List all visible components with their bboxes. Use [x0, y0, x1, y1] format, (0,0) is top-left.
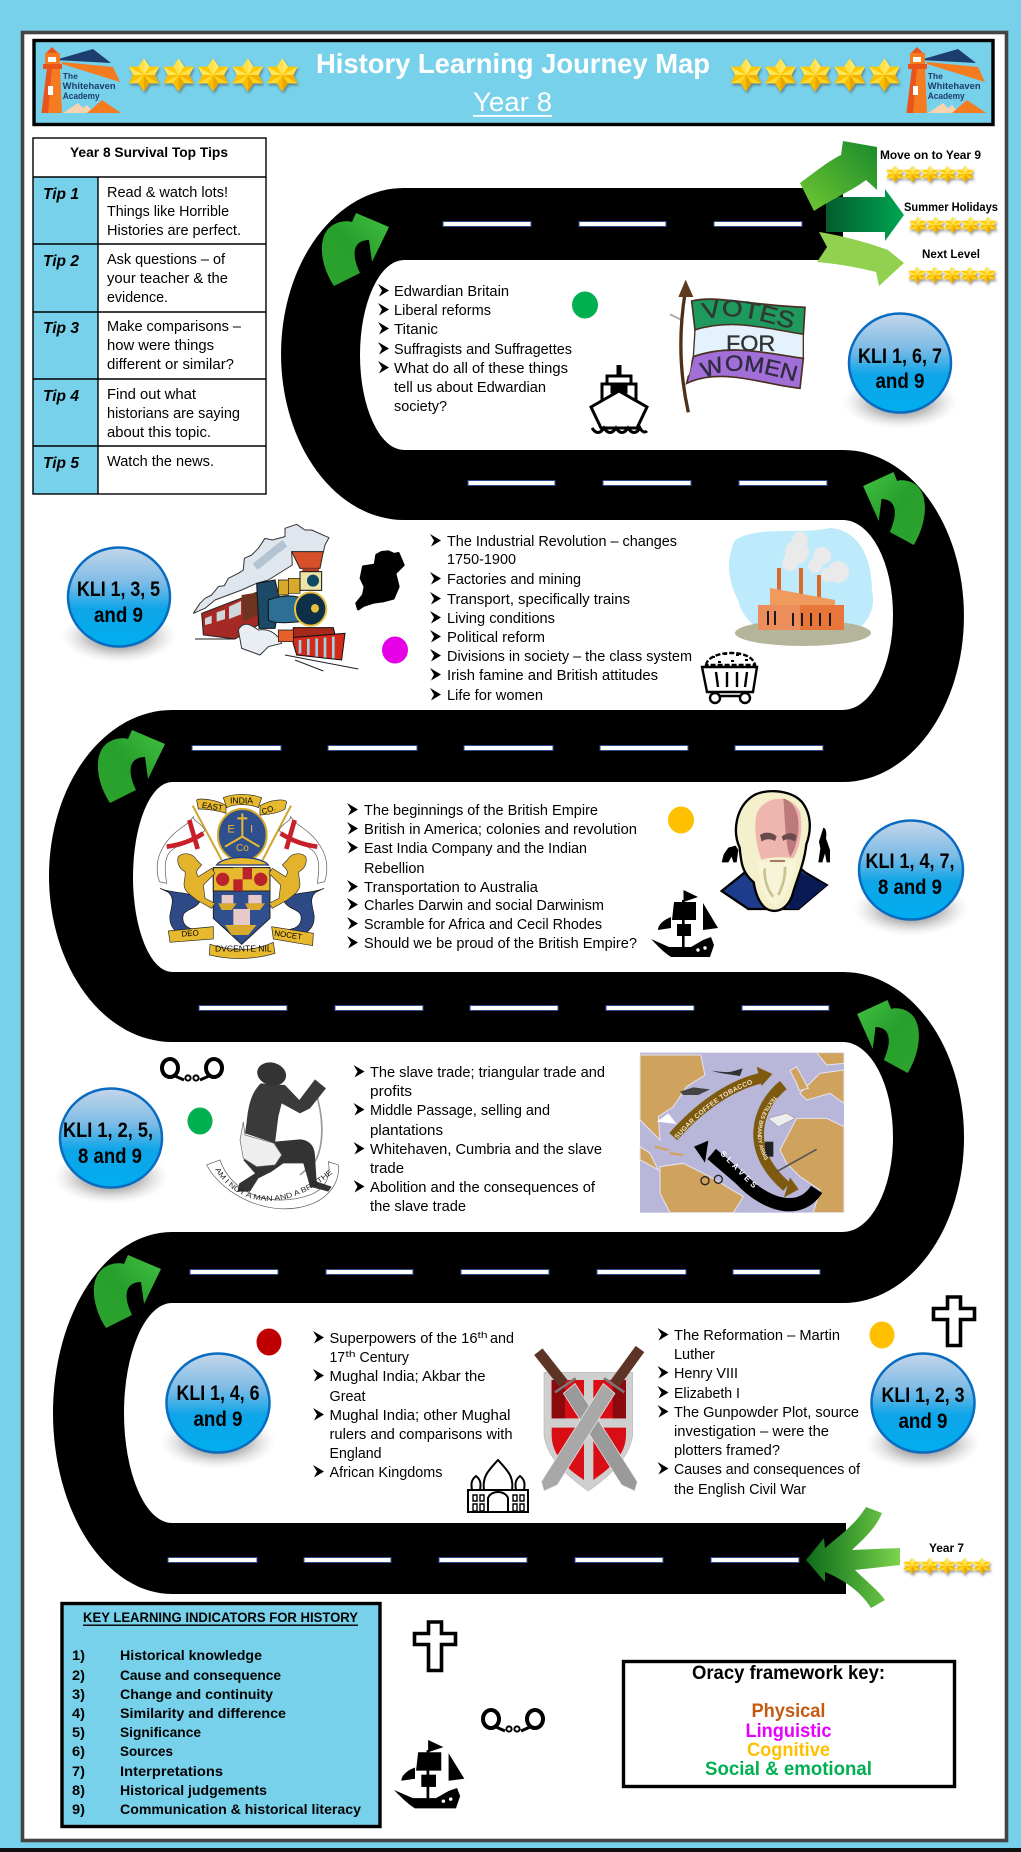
indicator list: 2)	[72, 1668, 85, 1683]
label: Move on to Year 9 with stars	[880, 150, 981, 182]
panel: Superpowers and Mughal India	[160, 1297, 981, 1512]
bullet list: Elizabeth I	[674, 1386, 740, 1402]
arrow: summer holidays	[826, 189, 904, 241]
image: Votes for Women flag badge	[670, 280, 806, 413]
tip 4: about this topic.	[107, 425, 211, 441]
icon: five gold stars left	[129, 58, 298, 92]
key: cognitive: Cognitive	[747, 1740, 830, 1761]
image: East India Company coat of arms	[157, 794, 327, 959]
tip 2: Tip 2	[43, 253, 79, 270]
KLI ball: 1, 4, 6 and 9: KLI 1, 4, 6	[176, 1382, 260, 1405]
icon: academy logo left	[42, 47, 121, 113]
indicator list: 3)	[72, 1687, 85, 1702]
tip 4: Tip 4	[43, 388, 79, 405]
oracy dot: cognitive	[870, 1322, 894, 1348]
title: History Learning Journey Map	[316, 48, 710, 79]
KLI ball: 1, 2, 5, 8 and 9: 8 and 9	[78, 1145, 142, 1168]
bullet list	[347, 803, 637, 952]
subtitle: Year 8: Year 8	[473, 87, 552, 117]
tip 2: Ask questions – of	[107, 252, 226, 268]
icon: map of Ireland	[357, 552, 403, 609]
bullet list: Luther	[674, 1347, 715, 1363]
indicator list: 9)	[72, 1802, 85, 1817]
indicator list: 4)	[72, 1706, 85, 1721]
KLI ball: 1, 4, 7, 8 and 9: 8 and 9	[878, 876, 942, 899]
tip 1: Histories are perfect.	[107, 223, 241, 239]
panel: survival top tips table	[33, 138, 266, 494]
label: Summer Holidays with stars: Summer Holidays	[904, 202, 998, 214]
bullet list: Superpowers of the 16	[330, 1331, 478, 1347]
indicator list: Historical knowledge	[120, 1648, 263, 1663]
road lane dashes	[168, 222, 829, 1562]
arrow: next level	[817, 232, 904, 286]
bullet list: Mughal India; Akbar the	[330, 1369, 486, 1385]
tip 1	[43, 185, 241, 239]
icon: cross	[414, 1622, 456, 1670]
road: winding black road	[49, 188, 964, 1594]
indicator list: 8)	[72, 1783, 85, 1798]
icon: academy logo right	[906, 47, 986, 113]
bullet list: profits	[370, 1084, 412, 1100]
image: East India Company coat of arms: DEO	[181, 928, 199, 939]
bullet list: What do all of these things	[394, 361, 568, 377]
panel: British Empire	[157, 791, 969, 959]
image: triangular trade map: SUGAR COFFEE TOBACCO	[674, 1080, 752, 1138]
bullet list: The Gunpowder Plot, source	[674, 1405, 859, 1421]
image: East India Company coat of arms: I	[250, 823, 253, 835]
bullet list: plantations	[370, 1123, 443, 1139]
KLI ball: 1, 3, 5 and 9: KLI 1, 3, 5	[77, 578, 160, 601]
indicator list: Significance	[120, 1725, 201, 1740]
bullet list: British in America; colonies and revolution	[364, 822, 637, 838]
panel: Industrial Revolution	[61, 524, 873, 704]
bullet list: Factories and mining	[447, 572, 581, 588]
bullet list: Divisions in society – the class system	[447, 649, 692, 665]
bullet list: The Industrial Revolution – changes	[447, 534, 677, 550]
KLI ball: 1, 2, 5, 8 and 9	[53, 1088, 169, 1204]
bullet list: th	[346, 1349, 356, 1360]
KLI ball: 1, 4, 6 and 9: and 9	[194, 1408, 242, 1431]
bullet list: investigation – were the	[674, 1424, 829, 1440]
heading: Oracy framework key:	[692, 1663, 885, 1684]
image: East India Company coat of arms: Co	[236, 843, 249, 854]
tip 5: Watch the news.	[107, 454, 214, 470]
bullet list: Causes and consequences of	[674, 1462, 861, 1478]
panel: key learning indicators	[62, 1604, 380, 1826]
bullet list: Living conditions	[447, 611, 555, 627]
icon: cross	[934, 1297, 974, 1346]
indicator list: Similarity and difference	[120, 1706, 287, 1721]
bullet list: tell us about Edwardian	[394, 380, 546, 396]
bullet list: Liberal reforms	[394, 303, 491, 319]
bullet list: England	[330, 1446, 382, 1462]
image: East India Company coat of arms: EAST	[201, 801, 223, 813]
KLI ball: 1, 2, 3 and 9	[865, 1354, 981, 1470]
oracy dot: physical	[256, 1328, 282, 1356]
image: factory	[729, 528, 873, 646]
tip 5: Tip 5	[43, 455, 80, 472]
arrow: move on to Year 9	[800, 141, 877, 211]
bullet list: Scramble for Africa and Cecil Rhodes	[364, 917, 602, 933]
key: social and emotional: Social & emotional	[705, 1759, 872, 1780]
KLI ball: 1, 2, 5, 8 and 9: KLI 1, 2, 5,	[63, 1119, 153, 1142]
image: East India Company coat of arms: DVCENTE NIL	[215, 945, 272, 954]
image: East India Company coat of arms: NOCET	[274, 929, 303, 942]
image: Votes for Women flag badge: VOTES	[700, 300, 794, 328]
label: Year 7 with stars	[903, 1541, 991, 1574]
KLI ball: 1, 3, 5 and 9	[61, 548, 177, 663]
image: East India Company coat of arms: CO.	[260, 803, 277, 816]
bullet list: th	[478, 1330, 488, 1341]
bullet list: Political reform	[447, 630, 545, 646]
bullet list: Titanic	[394, 322, 438, 338]
image: Votes for Women flag badge: FOR	[726, 331, 775, 356]
heading: KEY LEARNING INDICATORS FOR HISTORY	[83, 1610, 358, 1625]
icon: academy logo right: The	[928, 71, 943, 81]
tip 3: Make comparisons –	[107, 319, 242, 335]
indicator list: Change and continuity	[120, 1687, 274, 1702]
indicator list: 5)	[72, 1725, 85, 1740]
bullet list: Mughal India; other Mughal	[330, 1408, 510, 1424]
icon: academy logo left: Academy	[63, 91, 100, 101]
bullet list: Charles Darwin and social Darwinism	[364, 898, 604, 914]
bullet list: trade	[370, 1161, 404, 1177]
KLI ball: 1, 6, 7 and 9: KLI 1, 6, 7	[858, 345, 942, 368]
tip 5	[43, 454, 214, 472]
bullet list: Transport, specifically trains	[447, 592, 630, 608]
bullet list	[378, 284, 572, 415]
bullet list	[313, 1330, 514, 1481]
image: Votes for Women flag badge: WOMEN	[698, 355, 798, 382]
icon: academy logo right: Whitehaven	[928, 81, 981, 91]
tip 4: Find out what	[107, 387, 196, 403]
icon: academy logo right: Academy	[928, 91, 965, 101]
arrow: road turn 2	[863, 472, 925, 545]
icon: academy logo left: Whitehaven	[63, 81, 116, 91]
tip 1: Tip 1	[43, 186, 79, 203]
KLI ball: 1, 2, 3 and 9: and 9	[898, 1410, 948, 1433]
icon: handcuffs	[162, 1059, 222, 1081]
tip 4: historians are saying	[107, 406, 240, 422]
label: Summer Holidays with stars	[904, 202, 998, 233]
bullet list	[354, 1065, 605, 1215]
icon: handcuffs	[483, 1710, 543, 1732]
bullet list: 1750-1900	[447, 552, 516, 568]
bullet list: Middle Passage, selling and	[370, 1103, 550, 1119]
bullet list: 17	[330, 1350, 345, 1366]
image: triangular trade map: SLAVES	[720, 1151, 756, 1188]
bullet list: Whitehaven, Cumbria and the slave	[370, 1142, 602, 1158]
arrow: road turn 4	[857, 1000, 919, 1073]
icon: five gold stars right	[731, 58, 900, 92]
panel: slave trade	[58, 1052, 844, 1215]
arrow: road turn 1	[322, 213, 389, 286]
image: East India Company coat of arms: E	[227, 823, 235, 835]
KLI ball: 1, 6, 7 and 9	[842, 314, 958, 429]
arrow: road turn 3	[98, 730, 165, 803]
indicator list: 6)	[72, 1744, 85, 1759]
tip 2: evidence.	[107, 290, 168, 306]
oracy dot: social and emotional	[188, 1108, 212, 1134]
indicator list: Cause and consequence	[120, 1668, 281, 1683]
bullet list: Transportation to Australia	[364, 880, 539, 896]
tip 3: Tip 3	[43, 320, 79, 337]
table heading: Year 8 Survival Top Tips	[70, 145, 228, 160]
tip 4	[43, 387, 240, 441]
icon: sailing ship	[651, 890, 718, 957]
tip 2	[43, 252, 228, 306]
bullet list: rulers and comparisons with	[330, 1427, 512, 1443]
bullet list: the slave trade	[370, 1199, 466, 1215]
panel: Edwardian Britain	[378, 280, 952, 434]
label: Next Level with stars	[908, 249, 996, 283]
icon: coal cart	[702, 653, 757, 703]
key: linguistic: Linguistic	[746, 1721, 832, 1742]
label: Year 7 with stars: Year 7	[929, 1541, 964, 1555]
arrow: Year 7 road start	[806, 1507, 900, 1608]
bullet list: Henry VIII	[674, 1366, 738, 1382]
image: triangular trade map	[640, 1052, 844, 1213]
image: steam train	[193, 524, 358, 671]
arrow: road turn 5	[94, 1255, 161, 1328]
KLI ball: 1, 4, 6 and 9	[160, 1354, 276, 1469]
label: Next Level with stars: Next Level	[922, 249, 980, 261]
key: physical: Physical	[752, 1701, 826, 1722]
KLI ball: 1, 4, 7, 8 and 9	[853, 820, 969, 936]
image: kneeling figure medallion: AM I NOT A MAN AND A BROTHER	[215, 1168, 333, 1201]
icon: Mughal palace	[468, 1460, 528, 1512]
bottom edge band	[0, 1848, 1021, 1852]
bullet list: plotters framed?	[674, 1443, 780, 1459]
bullet list: The Reformation – Martin	[674, 1328, 840, 1344]
bullet list: African Kingdoms	[330, 1465, 442, 1481]
indicator list: 1)	[72, 1648, 85, 1663]
bullet list	[658, 1328, 861, 1498]
image: Charles Darwin portrait	[722, 791, 830, 911]
image: shield and crossed swords	[538, 1349, 640, 1491]
bullet list: society?	[394, 399, 447, 415]
bullet list	[430, 534, 692, 704]
KLI ball: 1, 6, 7 and 9: and 9	[876, 370, 924, 393]
tip 3: how were things	[107, 338, 214, 354]
oracy dot: linguistic	[382, 636, 408, 664]
header banner	[34, 40, 993, 124]
bullet list: Life for women	[447, 688, 543, 704]
bullet list: Should we be proud of the British Empire?	[364, 936, 637, 952]
tip 1: Read & watch lots!	[107, 185, 228, 201]
indicator list: Historical judgements	[120, 1783, 267, 1798]
tip 1: Things like Horrible	[107, 204, 229, 220]
bullet list: the English Civil War	[674, 1482, 806, 1498]
indicator list: Sources	[120, 1744, 173, 1759]
icon: sailing ship	[394, 1740, 464, 1808]
image: East India Company coat of arms: INDIA	[230, 796, 253, 806]
indicator list: Interpretations	[120, 1764, 223, 1779]
indicator list: 7)	[72, 1764, 85, 1779]
indicator list	[72, 1648, 362, 1817]
icon: academy logo left: The	[63, 71, 78, 81]
bullet list: Abolition and the consequences of	[370, 1180, 596, 1196]
bullet list: Century	[360, 1350, 410, 1366]
bullet list: Great	[330, 1389, 366, 1405]
bullet list: The beginnings of the British Empire	[364, 803, 598, 819]
image: triangular trade map: TEXTILES BRANDY ARMS	[758, 1096, 778, 1160]
bullet list: and	[490, 1331, 514, 1347]
bullet list: The slave trade; triangular trade and	[370, 1065, 605, 1081]
indicator list: Communication & historical literacy	[120, 1802, 362, 1817]
KLI ball: 1, 3, 5 and 9: and 9	[94, 604, 143, 627]
KLI ball: 1, 4, 7, 8 and 9: KLI 1, 4, 7,	[866, 850, 954, 873]
tip 3: different or similar?	[107, 357, 234, 373]
tip 3	[43, 319, 242, 373]
oracy dot: cognitive	[668, 806, 694, 834]
bullet list: Edwardian Britain	[394, 284, 509, 300]
KLI ball: 1, 2, 3 and 9: KLI 1, 2, 3	[882, 1384, 964, 1407]
bullet list: East India Company and the Indian	[364, 841, 587, 857]
panel: oracy framework key	[624, 1662, 954, 1786]
bullet list: Suffragists and Suffragettes	[394, 342, 572, 358]
icon: cruise ship	[591, 365, 647, 432]
bullet list: Rebellion	[364, 861, 424, 877]
oracy dot: social and emotional	[572, 292, 598, 318]
bullet list: Irish famine and British attitudes	[447, 668, 658, 684]
label: Move on to Year 9 with stars: Move on to Year 9	[880, 150, 981, 162]
tip 2: your teacher & the	[107, 271, 228, 287]
